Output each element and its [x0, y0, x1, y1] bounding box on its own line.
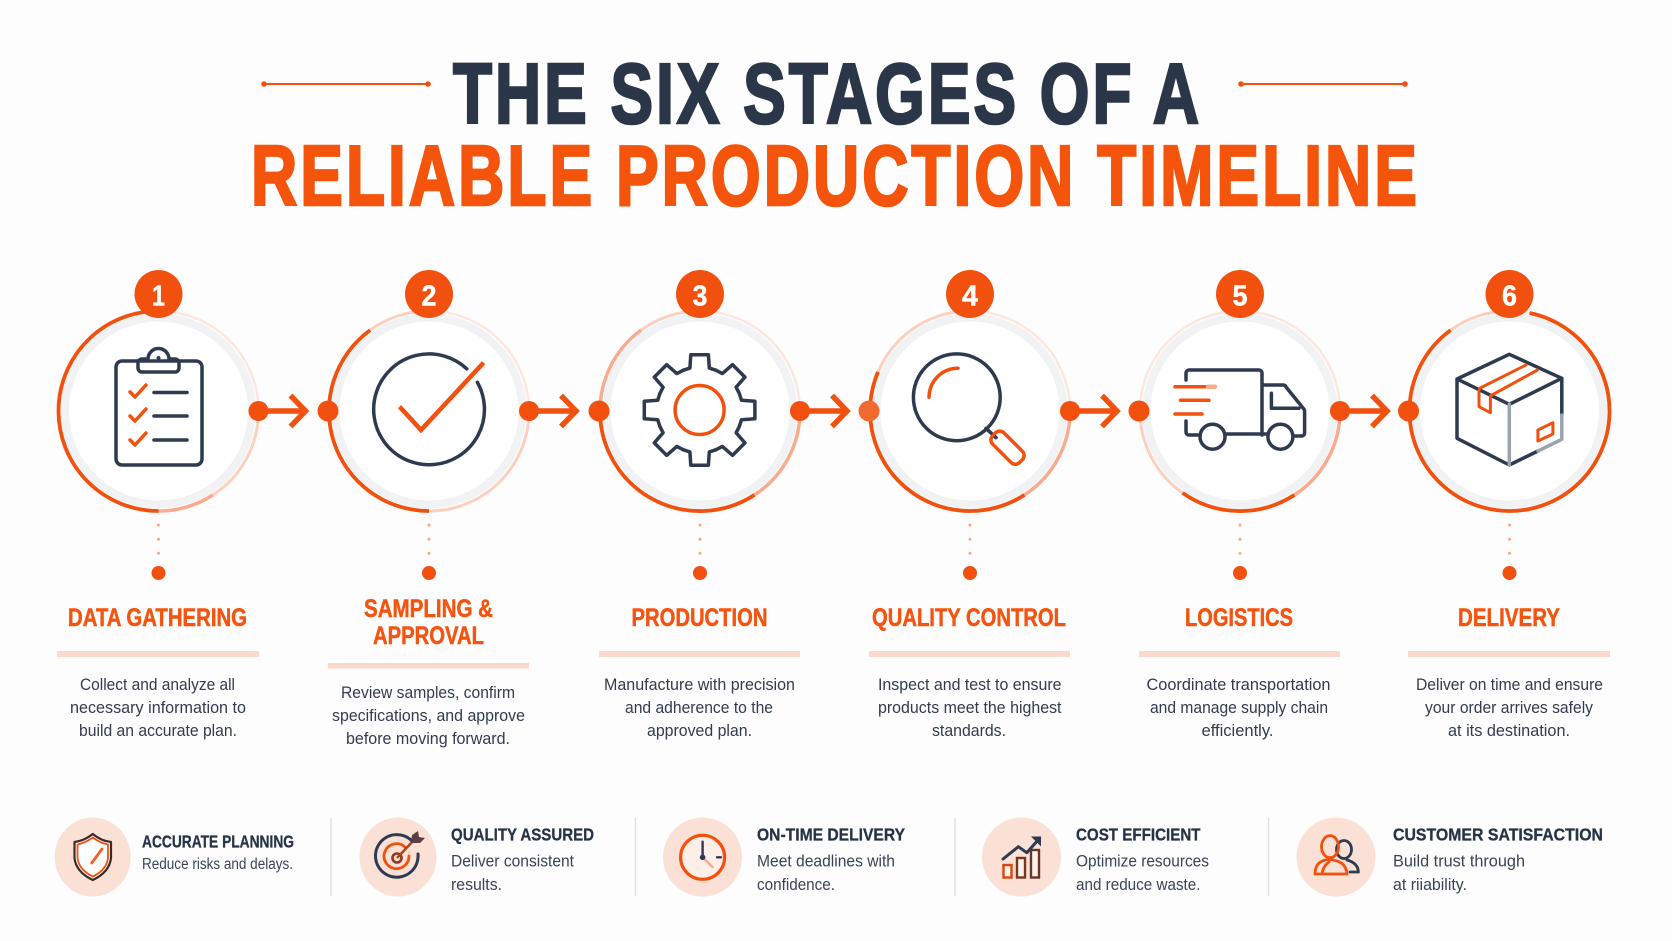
step 1 progress ring: [58, 270, 306, 511]
benefit: cost efficient: Optimize resources: [1076, 852, 1209, 870]
step 2 progress ring: 2: [422, 280, 436, 312]
step 6 label: at its destination.: [1448, 721, 1570, 740]
step 3 label: and adherence to the: [625, 698, 773, 717]
step 4 label: QUALITY CONTROL: [872, 604, 1066, 632]
icon: package box: [1457, 354, 1562, 465]
icon: magnifier: [913, 354, 1027, 467]
title: THE SIX STAGES OF A: [453, 47, 1202, 142]
benefit: quality assured: Deliver consistent: [451, 852, 574, 870]
step 4 label: [869, 604, 1070, 740]
step 2 connector: [422, 525, 436, 580]
step 5 label: efficiently.: [1202, 721, 1274, 740]
step 4 progress ring: [858, 270, 1117, 511]
benefit: on-time delivery: confidence.: [757, 876, 835, 894]
step 5 label: [1139, 604, 1340, 740]
step 2 label: specifications, and approve: [332, 706, 525, 725]
step 4 connector: [963, 525, 977, 580]
step 1 label: DATA GATHERING: [68, 604, 247, 632]
step 4 label: products meet the highest: [878, 698, 1062, 717]
benefit: quality assured: [360, 818, 594, 896]
benefit strip dividers: [331, 818, 1268, 896]
step 5 label: Coordinate transportation: [1146, 675, 1330, 694]
icon: gear: [644, 355, 755, 465]
step 6 label: [1408, 604, 1610, 740]
step 3 label: approved plan.: [647, 721, 752, 740]
step 3 progress ring: [588, 270, 847, 511]
step 5 label: and manage supply chain: [1150, 698, 1328, 717]
step 4 progress ring: 4: [962, 280, 978, 312]
step 2 progress ring: [318, 270, 576, 511]
step 1 connector: [152, 525, 166, 580]
step 4 label: standards.: [932, 721, 1006, 740]
benefit: customer satisfaction: [1296, 818, 1603, 896]
step 1 label: Collect and analyze all: [80, 675, 235, 694]
step 6 progress ring: 6: [1502, 280, 1517, 312]
step 1 progress ring: 1: [152, 280, 165, 312]
step 2 label: APPROVAL: [373, 622, 484, 650]
step 4 label: Inspect and test to ensure: [878, 675, 1062, 694]
step 5 connector: [1233, 525, 1247, 580]
benefit: quality assured: QUALITY ASSURED: [451, 824, 594, 844]
step 5 progress ring: [1128, 270, 1387, 511]
benefit: cost efficient: and reduce waste.: [1076, 876, 1200, 894]
benefit: accurate planning: ACCURATE PLANNING: [142, 832, 294, 852]
benefit: on-time delivery: ON-TIME DELIVERY: [757, 824, 905, 844]
title ornament left: [261, 81, 431, 87]
title ornament right: [1238, 81, 1408, 87]
benefit: cost efficient: [982, 818, 1209, 896]
step 3 label: PRODUCTION: [632, 604, 768, 632]
step 5 label: LOGISTICS: [1185, 604, 1293, 632]
step 5 progress ring: 5: [1232, 280, 1248, 312]
step 6 progress ring: [1398, 270, 1610, 511]
benefit: customer satisfaction: CUSTOMER SATISFACTION: [1393, 824, 1603, 844]
step 2 label: SAMPLING &: [364, 595, 493, 623]
step 1 label: necessary information to: [70, 698, 246, 717]
icon: clipboard: [116, 349, 202, 465]
icon: delivery truck: [1175, 370, 1305, 449]
step 1 label: build an accurate plan.: [79, 721, 237, 740]
step 6 label: your order arrives safely: [1425, 698, 1593, 717]
step 3 progress ring: 3: [692, 280, 708, 312]
step 2 label: before moving forward.: [346, 729, 510, 748]
step 1 label: [57, 604, 259, 740]
benefit: cost efficient: COST EFFICIENT: [1076, 824, 1201, 844]
step 3 label: Manufacture with precision: [604, 675, 795, 694]
step 6 label: Deliver on time and ensure: [1416, 675, 1603, 694]
benefit: quality assured: results.: [451, 876, 502, 894]
step 2 label: [328, 595, 529, 748]
benefit: accurate planning: Reduce risks and delays.: [142, 856, 293, 873]
benefit: customer satisfaction: at riiability.: [1393, 876, 1467, 894]
benefit: on-time delivery: Meet deadlines with: [757, 852, 895, 870]
step 6 label: DELIVERY: [1458, 604, 1560, 632]
step 6 connector: [1502, 525, 1516, 580]
step 2 label: Review samples, confirm: [341, 683, 515, 702]
benefit: customer satisfaction: Build trust through: [1393, 852, 1525, 870]
step 3 connector: [693, 525, 707, 580]
step 3 label: [599, 604, 800, 740]
benefit: accurate planning: [55, 818, 294, 896]
title: [251, 47, 1420, 224]
icon: check mark: [374, 354, 484, 465]
benefit: on-time delivery: [663, 818, 905, 896]
